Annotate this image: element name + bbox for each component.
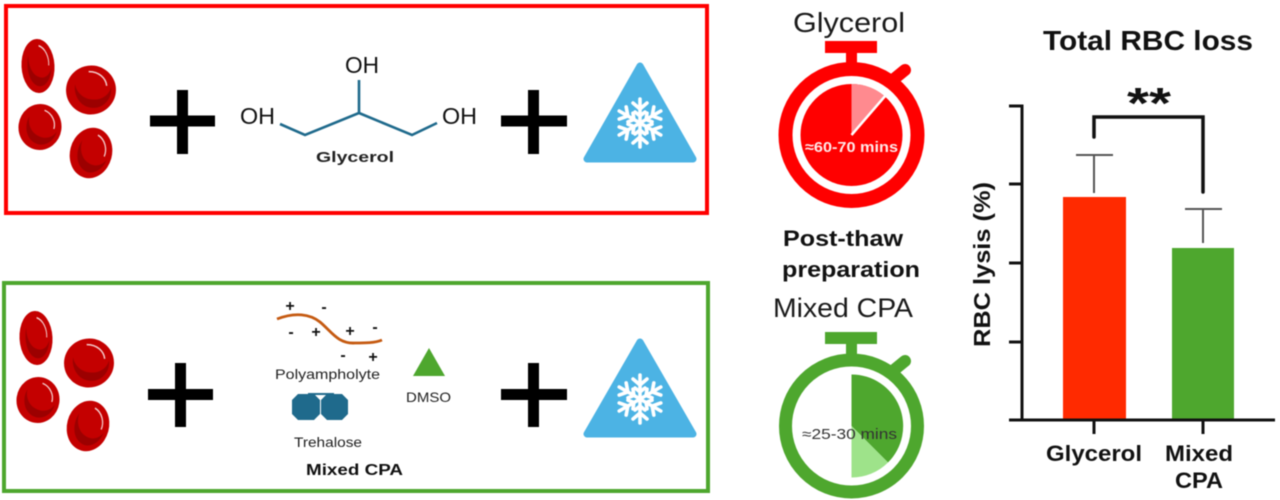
panel border red (6, 6, 707, 213)
x label glycerol: Glycerol (1046, 441, 1142, 466)
heading: post-thaw preparation: preparation (782, 257, 920, 282)
glycerol molecule: OH (345, 52, 379, 78)
heading: post-thaw preparation (782, 226, 920, 282)
icon: plus (150, 90, 215, 154)
icon: plus (148, 363, 213, 427)
polyampholyte curve and charges: + (311, 324, 321, 341)
icon: mixed CPA stopwatch (786, 332, 918, 492)
heading: mixed CPA timer: Mixed CPA (773, 293, 913, 323)
icon: red blood cells (14, 310, 119, 456)
icon: plus (501, 363, 567, 427)
polyampholyte curve and charges: - (288, 324, 294, 341)
panel border green (4, 283, 708, 491)
panel: glycerol formulation (6, 6, 707, 213)
x label mixed CPA (1165, 441, 1233, 493)
glycerol molecule: OH (240, 103, 275, 129)
icon: freezing triangle (587, 342, 693, 434)
polyampholyte curve and charges (275, 298, 382, 382)
glycerol molecule: OH (442, 103, 477, 129)
heading: glycerol timer: Glycerol (793, 7, 905, 38)
DMSO label: DMSO (406, 389, 451, 405)
bar: glycerol (1063, 197, 1126, 420)
icon: trehalose (292, 393, 362, 450)
polyampholyte curve and charges: + (368, 349, 378, 366)
polyampholyte curve and charges: + (285, 298, 295, 315)
error bars (1076, 155, 1222, 243)
polyampholyte label: Polyampholyte (275, 366, 380, 382)
polyampholyte curve and charges: - (321, 299, 327, 316)
polyampholyte curve and charges: - (340, 347, 346, 364)
axes (1009, 106, 1275, 434)
icon: plus (501, 90, 567, 154)
icon: DMSO triangle (406, 348, 451, 405)
mixed CPA label: Mixed CPA (306, 462, 404, 479)
glycerol label: Glycerol (316, 149, 394, 166)
significance stars: ** (1127, 79, 1172, 128)
icon: glycerol stopwatch (786, 41, 918, 201)
chart title: Total RBC loss (1043, 25, 1253, 56)
trehalose label: Trehalose (294, 434, 362, 450)
x label mixed CPA: Mixed (1165, 441, 1233, 466)
bar chart: total RBC loss (969, 25, 1275, 493)
icon: freezing triangle (587, 66, 693, 159)
icon: red blood cells (16, 38, 121, 183)
y axis label: RBC lysis (%) (969, 182, 995, 347)
glycerol time label: ≈60-70 mins (805, 139, 898, 156)
polyampholyte curve and charges: + (345, 323, 355, 340)
panel: mixed CPA formulation (4, 283, 708, 491)
mixed CPA time label: ≈25-30 mins (802, 427, 897, 443)
polyampholyte curve and charges: - (372, 319, 378, 336)
significance bracket (1094, 117, 1203, 192)
glycerol molecule (240, 52, 477, 166)
x label mixed CPA: CPA (1175, 468, 1223, 493)
bar: mixed CPA (1172, 248, 1234, 420)
heading: post-thaw preparation: Post-thaw (783, 226, 904, 251)
